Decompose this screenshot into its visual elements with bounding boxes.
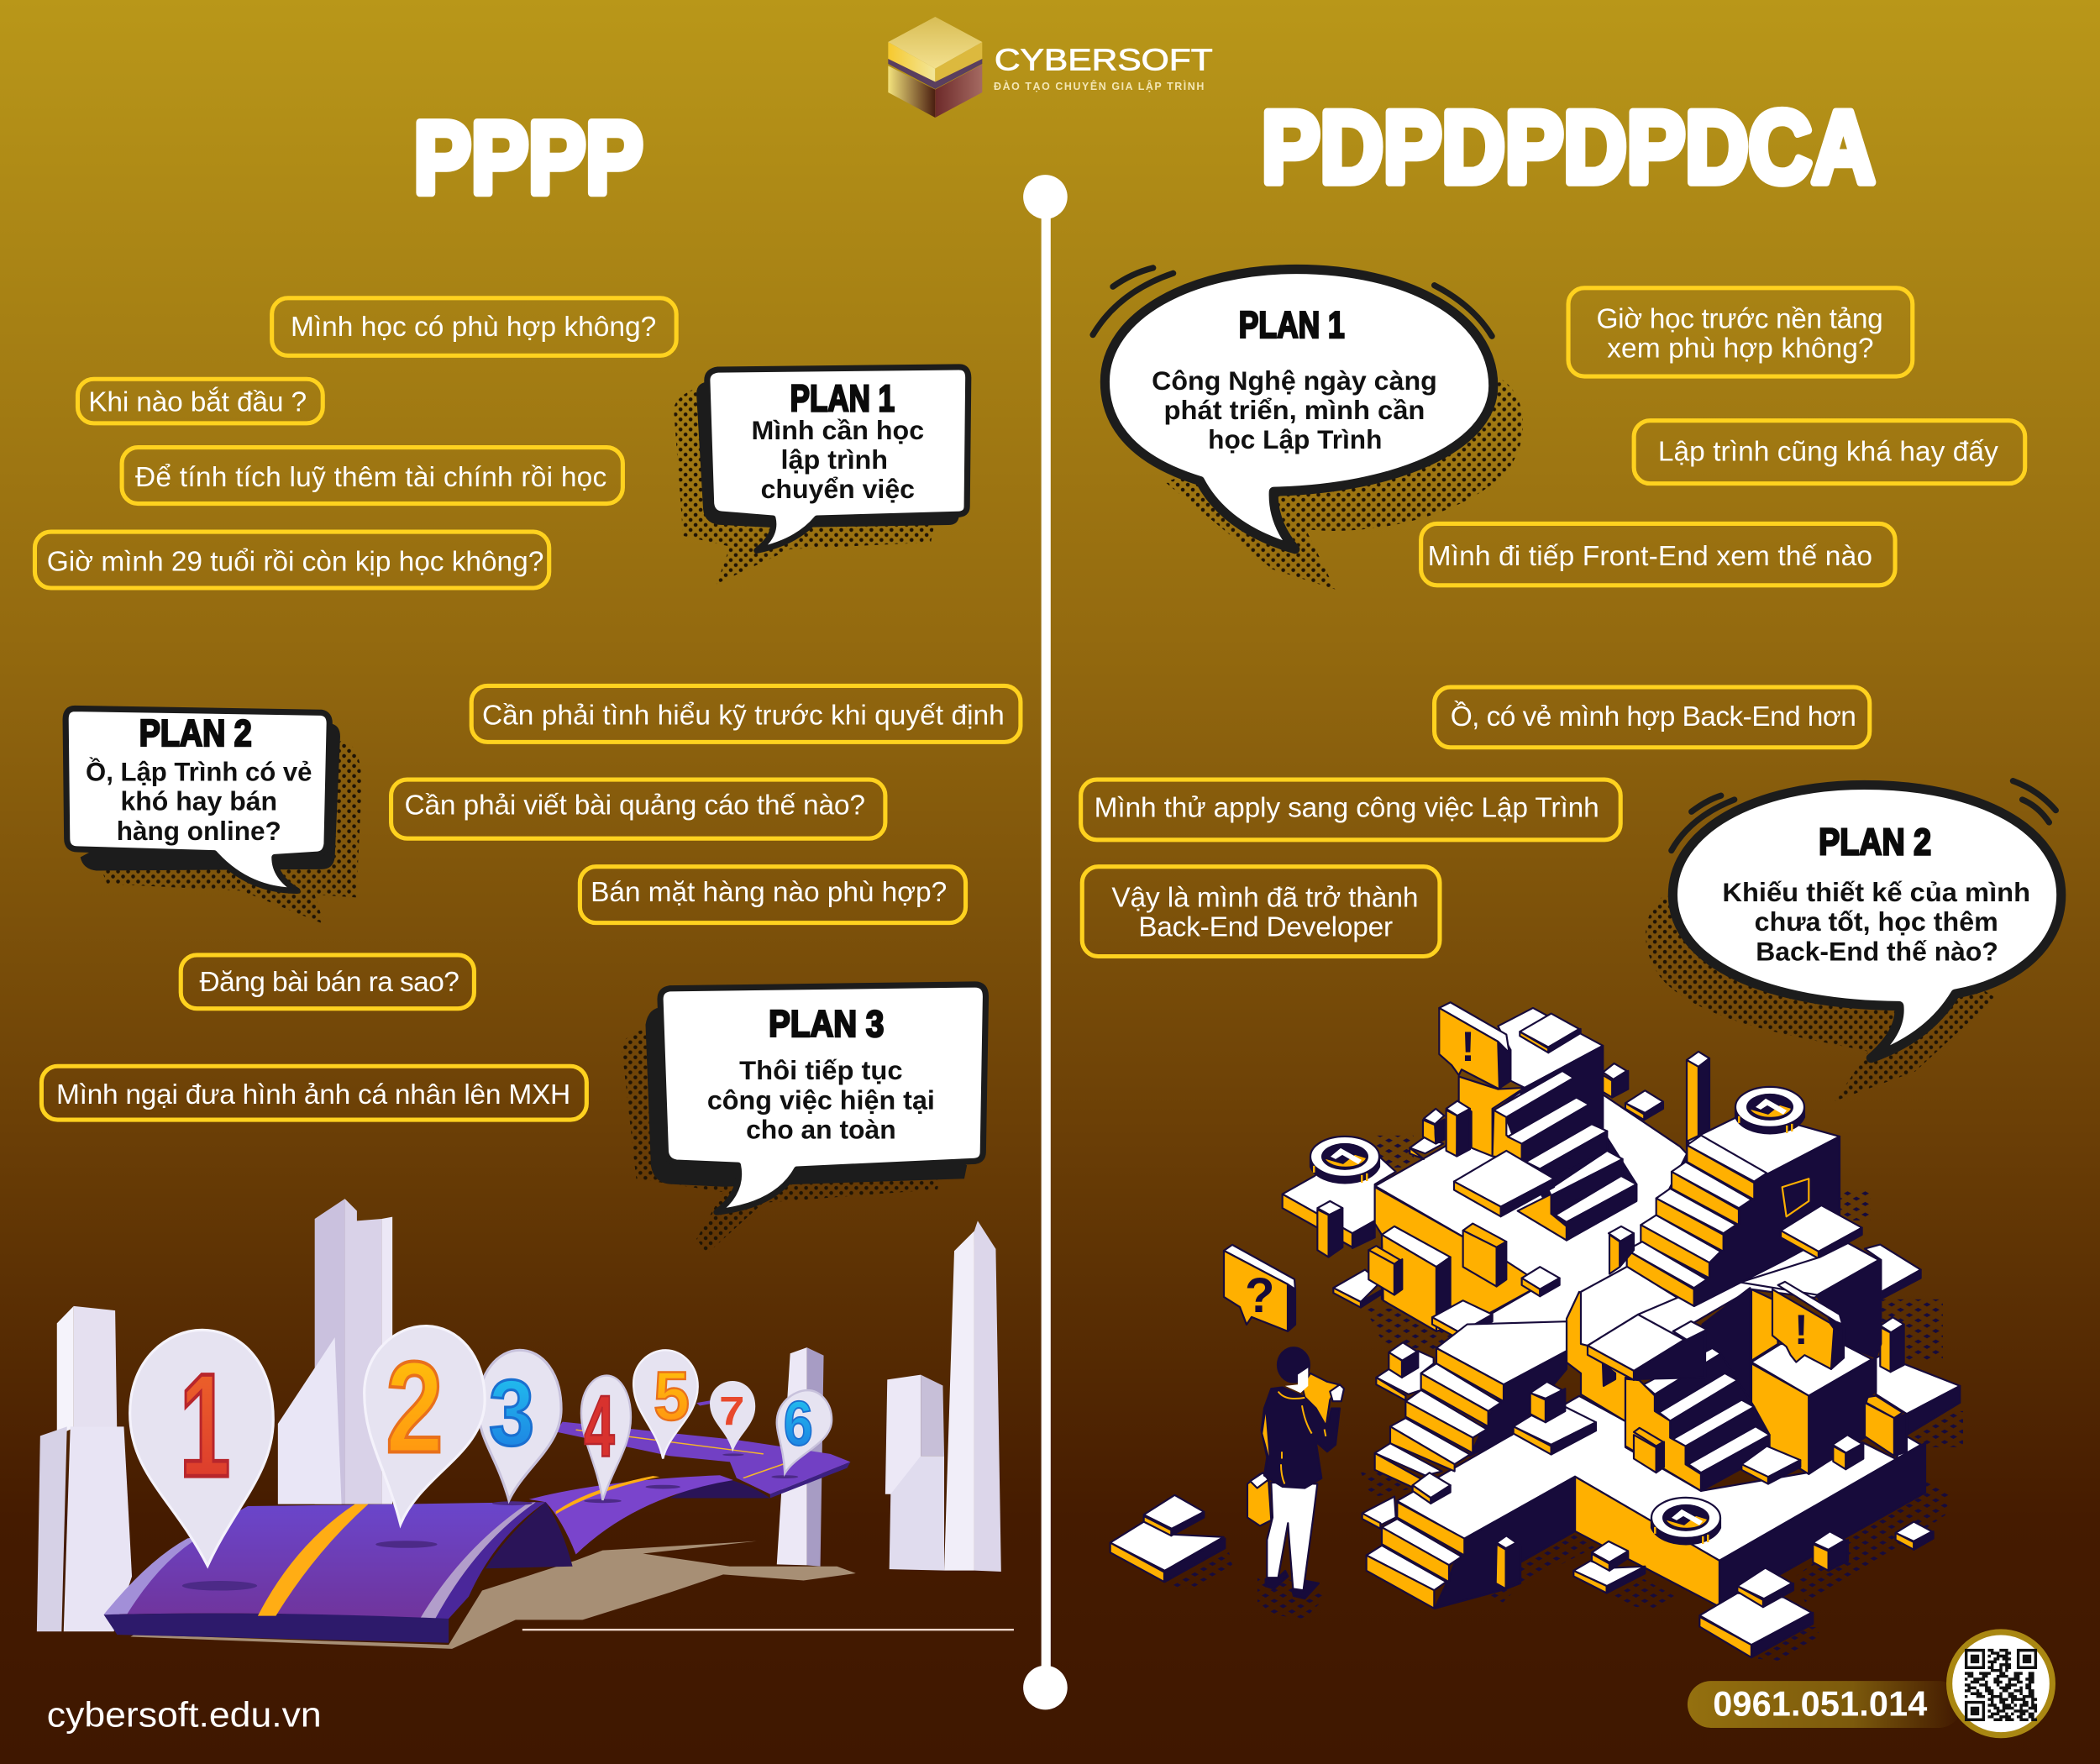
note: Vậy là mình đã trở thành	[1082, 867, 1440, 956]
pin 7: 7	[719, 1390, 744, 1435]
speech bubble: left plan 1	[674, 367, 969, 584]
exclamation tag top	[1439, 1002, 1510, 1089]
upper staircase tower	[1410, 1008, 1663, 1241]
exclamation tag right and small blocks	[1772, 1282, 1844, 1369]
question: Cần phải tình hiểu	[471, 685, 1021, 742]
question tag: ?	[1245, 1269, 1274, 1323]
heading: PDPDPDPDCA: PDPDPDPDCA	[1262, 90, 1875, 204]
top slab over lower stairs	[1588, 1315, 1707, 1380]
halftone shadows	[1169, 1136, 1963, 1661]
plan 3 label: PLAN 3	[769, 1004, 884, 1045]
plan 2 body: Ồ, Lập Trình có vẻ	[86, 757, 312, 787]
plan 1 body: Mình cần học	[751, 415, 924, 445]
note: Mình đi tiếp Front-End	[1421, 523, 1895, 585]
person looking at maze	[1247, 1347, 1344, 1599]
question: Mình ngại đưa hình ảnh	[41, 1066, 586, 1120]
logo tagline: ĐÀO TẠO CHUYÊN GIA LẬP TRÌNH	[994, 80, 1204, 92]
plan 1 body: chuyển việc	[761, 474, 915, 504]
pin 5	[633, 1350, 698, 1458]
question: Mình học có phù hợp không	[272, 298, 676, 355]
question: Để tính tích luỹ	[122, 448, 622, 504]
pin 6	[777, 1388, 832, 1473]
right plan 2 body: Back-End thế nào?	[1756, 936, 1998, 966]
lower center orange block	[1567, 1267, 1677, 1421]
question: Khi nào bắt đầu: Khi nào bắt đầu ?	[88, 386, 307, 418]
right upper block and platform	[1865, 1245, 1960, 1435]
plan 3 body: cho an toàn	[746, 1114, 896, 1144]
tall pillar	[1687, 1052, 1709, 1149]
central white floor	[1375, 1092, 1879, 1384]
logo: Cybersoft	[888, 17, 1213, 118]
plan 2 label: PLAN 2	[139, 713, 252, 754]
speech bubble: left plan 3	[622, 984, 985, 1253]
QR code badge	[1950, 1632, 2052, 1735]
question: Bán mặt hàng: Bán mặt hàng nào phù hợp?	[591, 877, 947, 908]
small stack: bottom left	[1110, 1495, 1225, 1582]
question: Cần phải tình hiểu: Cần phải tình hiểu kỹ trước khi quyết định	[482, 701, 1005, 732]
pin 1: 1	[180, 1343, 230, 1508]
speech bubble: right plan 2	[1646, 781, 2061, 1101]
right plan 1 body	[1152, 365, 1437, 454]
note: Mình thử apply	[1081, 780, 1620, 840]
illustration: city road with numbered pins	[37, 1199, 1014, 1649]
plan 2 body: khó hay bán	[120, 786, 277, 816]
note: Giờ học trước nền tảng	[1568, 288, 1913, 376]
lower left stairs and blocks	[1362, 1321, 1645, 1609]
question: Bán mặt hàng	[580, 867, 966, 923]
plan 2 body: hàng online?	[117, 816, 281, 846]
plan 2 body	[86, 757, 312, 846]
coin: top left	[1310, 1137, 1379, 1183]
question: Cần phải viết bài	[391, 780, 885, 838]
question: Đăng bài bán: Đăng bài bán ra sao?	[200, 967, 459, 998]
illustration: isometric maze with person	[1110, 1002, 1963, 1661]
lower white base platform	[1397, 1396, 1925, 1609]
plan 1 body: lập trình	[781, 444, 888, 475]
right plan 1 body: học Lập Trình	[1208, 424, 1382, 454]
coin: bottom	[1651, 1498, 1720, 1544]
center-right tower and orange strip	[1673, 1243, 1907, 1474]
question tag	[1224, 1245, 1295, 1331]
note: Lập trình cũng khá hay đấy	[1634, 421, 2025, 484]
exclamation tag top: !	[1461, 1023, 1475, 1070]
question: Giờ mình 29 tuổi: Giờ mình 29 tuổi rồi còn kịp học không?	[47, 546, 543, 577]
note: Mình đi tiếp Front-End: Mình đi tiếp Front-End xem thế nào	[1428, 541, 1872, 572]
note: Mình thử apply: Mình thử apply sang công việc Lập Trình	[1095, 793, 1599, 824]
exclamation tag right and small blocks: !	[1794, 1306, 1809, 1353]
pin 2	[365, 1326, 485, 1525]
pin 5: 5	[654, 1357, 690, 1435]
note: Vậy là mình đã trở thành: Vậy là mình đã trở thành	[1111, 882, 1418, 913]
pin 1	[130, 1330, 273, 1566]
note: Ồ có vẻ mình hợp Back-End: Ồ, có vẻ mình hợp Back-End hơn	[1451, 701, 1856, 732]
pin 3: 3	[489, 1360, 534, 1466]
right plan 2 label: PLAN 2	[1819, 822, 1931, 863]
right plan 2 body: chưa tốt, học thêm	[1755, 906, 1998, 937]
question: Khi nào bắt đầu	[77, 379, 323, 423]
plan 3 body: công việc hiện tại	[707, 1084, 935, 1115]
right plan 1 label: PLAN 1	[1239, 305, 1345, 346]
speech bubble: right plan 1	[1093, 268, 1523, 590]
right plan 1 body: Công Nghệ ngày càng	[1152, 365, 1437, 396]
right plan 2 body: Khiếu thiết kế của mình	[1722, 877, 2030, 907]
right plan 1 body: phát triển, mình cần	[1164, 395, 1425, 425]
plan 1 body	[751, 415, 924, 504]
note: Vậy là mình đã trở thành: Back-End Developer	[1138, 912, 1393, 943]
right stair steps	[1609, 1136, 1862, 1306]
back platform with coin	[1283, 1148, 1396, 1248]
pin 4: 4	[584, 1377, 615, 1474]
right staircase tower	[1638, 1111, 1840, 1306]
left pillar and orange block	[1317, 1187, 1560, 1340]
speech bubble: left plan 2	[66, 709, 361, 924]
question: Mình ngại đưa hình ảnh: Mình ngại đưa hình ảnh cá nhân lên MXH	[56, 1079, 570, 1110]
question: Để tính tích luỹ: Để tính tích luỹ thêm tài chính rồi học	[135, 462, 606, 493]
coin: top right	[1735, 1087, 1804, 1133]
question: Đăng bài bán	[181, 955, 474, 1009]
question: Giờ mình 29 tuổi	[34, 532, 549, 588]
small blocks on base	[1699, 1435, 1934, 1657]
note: Giờ học trước nền tảng: xem phù hợp không?	[1607, 333, 1874, 365]
note: Lập trình cũng khá hay đấy: Lập trình cũng khá hay đấy	[1658, 437, 1998, 468]
question: Mình học có phù hợp không: Mình học có phù hợp không?	[291, 312, 656, 343]
note: Ồ có vẻ mình hợp Back-End	[1435, 687, 1870, 748]
timeline divider	[1023, 175, 1068, 1709]
pin 3	[478, 1350, 561, 1500]
line under road	[522, 1629, 1014, 1630]
icon: gold cube	[888, 17, 982, 118]
buildings and road	[37, 1199, 1001, 1649]
right plan 2 body	[1722, 877, 2030, 966]
lower center stairs	[1625, 1348, 1770, 1491]
website: cybersoft.edu.vn	[47, 1694, 322, 1734]
heading: PPPP: PPPP	[414, 101, 643, 215]
phone pill	[1688, 1681, 1962, 1728]
logo wordmark: CYBERSOFT	[995, 44, 1213, 77]
plan 1 label: PLAN 1	[790, 379, 895, 420]
phone pill: 0961.051.014	[1713, 1684, 1927, 1724]
pin 2: 2	[386, 1334, 444, 1479]
pin 6: 6	[784, 1388, 813, 1459]
note: Giờ học trước nền tảng: Giờ học trước nền tảng	[1597, 304, 1883, 335]
question: Cần phải viết bài: Cần phải viết bài quảng cáo thế nào?	[405, 790, 865, 821]
plan 3 body: Thôi tiếp tục	[739, 1055, 903, 1085]
pin 7	[710, 1381, 755, 1452]
plan 3 body	[707, 1055, 935, 1144]
